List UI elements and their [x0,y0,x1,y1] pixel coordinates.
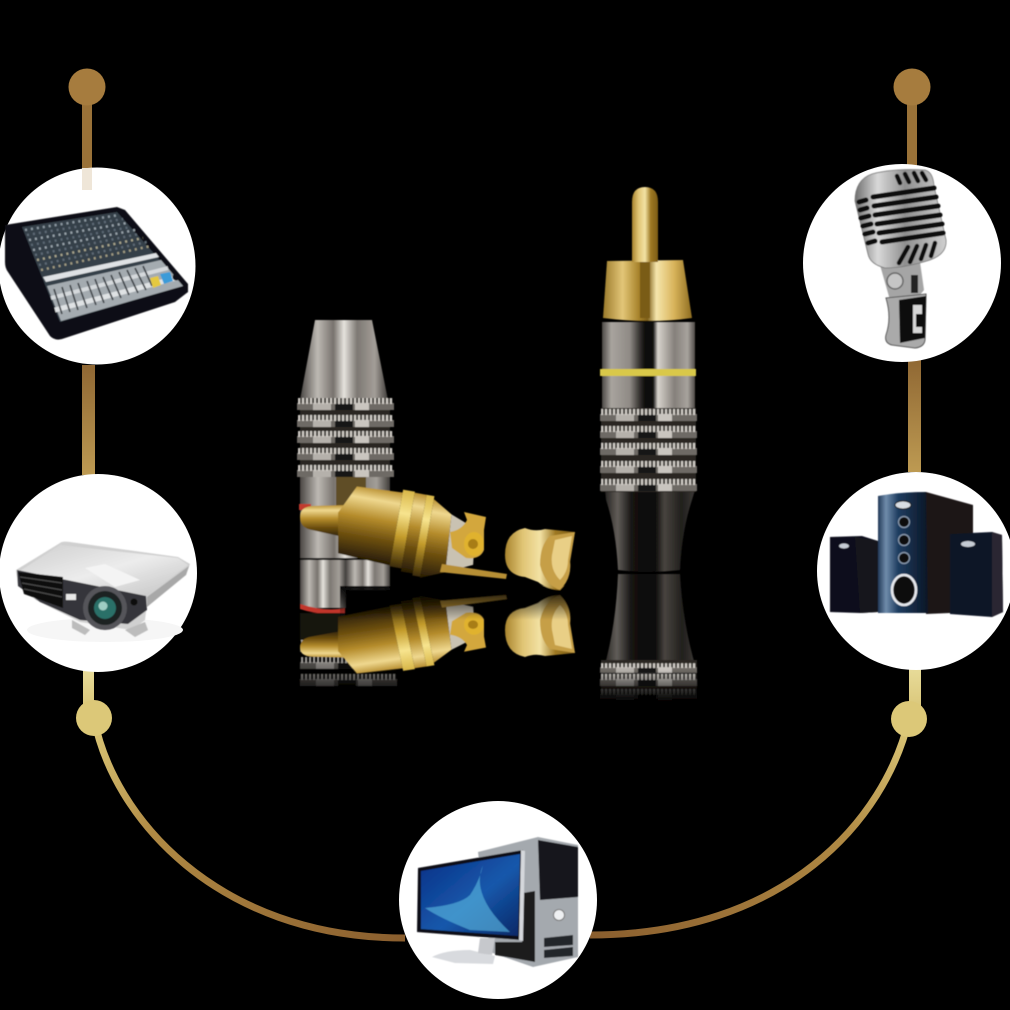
panel: audio mixer [0,168,196,364]
icon: projector [16,542,190,637]
connecting line: left side [82,100,405,938]
panel: microphone [803,164,1001,362]
node: top left [68,68,106,106]
left connector shell [297,320,394,560]
node: lower left [76,700,112,736]
photo: RCA connectors [295,187,703,702]
icon: microphone [855,170,946,348]
right connector plug [600,187,697,572]
icon: desktop computer [417,837,578,967]
gold cap [505,528,575,590]
connecting line: right side [590,100,921,935]
gold connector reflection [300,586,580,680]
icon: speaker system [830,492,1003,617]
node: lower right [891,701,927,737]
icon: mixer [5,207,188,340]
panel: desktop computer [399,801,597,999]
node: top right [894,68,930,106]
panel: projector [0,474,197,672]
left connector reflection [295,560,400,702]
gold connector body [300,479,507,587]
panel: speakers [817,472,1010,670]
right connector reflection [595,574,703,702]
